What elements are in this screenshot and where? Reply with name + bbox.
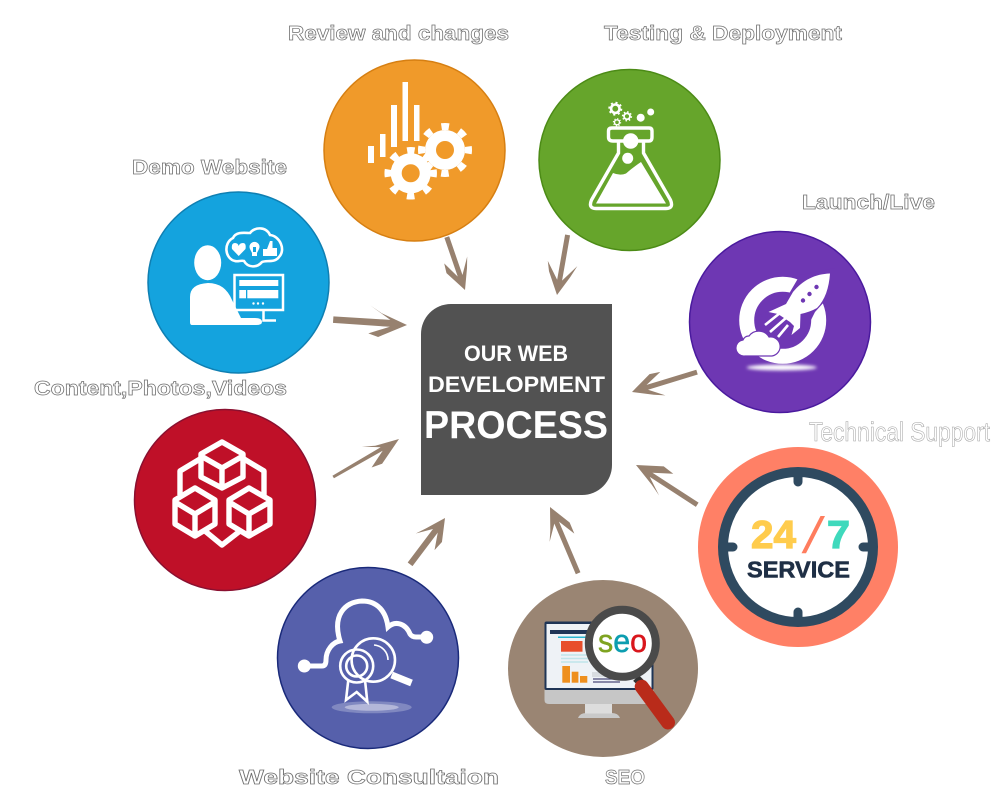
orange circle — [324, 60, 505, 241]
step: content, photos, videos — [34, 378, 316, 590]
arrow: launch to centre — [628, 361, 701, 404]
icon: 24/7 clock face: 7 — [827, 514, 850, 557]
title line: process: PROCESS — [424, 404, 608, 447]
step: technical support — [698, 417, 990, 647]
arrow: testing to centre — [542, 232, 582, 298]
icon: three linked cubes — [175, 442, 270, 545]
red circle — [134, 410, 316, 590]
heading: SEO — [605, 767, 645, 789]
title line: development: DEVELOPMENT — [428, 372, 605, 397]
green circle — [539, 70, 720, 250]
step: demo website — [132, 157, 329, 373]
purple circle — [690, 232, 870, 412]
icon: user at computer with feedback cloud — [190, 228, 283, 325]
step: seo — [508, 580, 698, 789]
central panel: process title — [421, 304, 612, 495]
coral circle — [698, 447, 898, 647]
arrow: consultation to centre — [399, 510, 455, 572]
arrow: demo website to centre — [332, 303, 408, 339]
arrow: review to centre — [435, 233, 477, 294]
step: website consultation — [239, 568, 499, 789]
icon: rocket, ring and cloud — [736, 268, 835, 370]
arrow: technical support to centre — [629, 453, 705, 516]
icon: bars and gears — [368, 82, 468, 196]
icon: monitor and magnifier with seo — [544, 610, 668, 722]
icon: cloud, magnifier and ribbon badge — [298, 601, 433, 713]
heading: Launch/Live — [802, 192, 935, 214]
heading: Review and changes — [288, 23, 509, 45]
step: review and changes — [288, 23, 509, 241]
arrow: content to centre — [327, 429, 406, 488]
icon: 24/7 clock face: SERVICE — [747, 556, 850, 582]
icon: flask with bubbles and gears — [590, 103, 672, 208]
arrow: seo to centre — [537, 502, 589, 579]
step: testing and deployment — [539, 23, 842, 250]
icon: monitor and magnifier with seo: seo — [598, 623, 647, 659]
blue circle — [148, 192, 329, 373]
heading: Testing & Deployment — [604, 23, 842, 45]
icon: 24/7 clock face: 24 — [751, 514, 796, 557]
title line: our web: OUR WEB — [464, 341, 568, 366]
indigo circle — [278, 568, 458, 748]
tan circle — [508, 580, 698, 757]
heading: Content,Photos,Videos — [34, 378, 287, 400]
step: launch / live — [690, 192, 935, 412]
heading: Website Consultaion — [239, 767, 499, 789]
heading: Demo Website — [132, 157, 287, 179]
icon: 24/7 clock face — [723, 472, 873, 622]
